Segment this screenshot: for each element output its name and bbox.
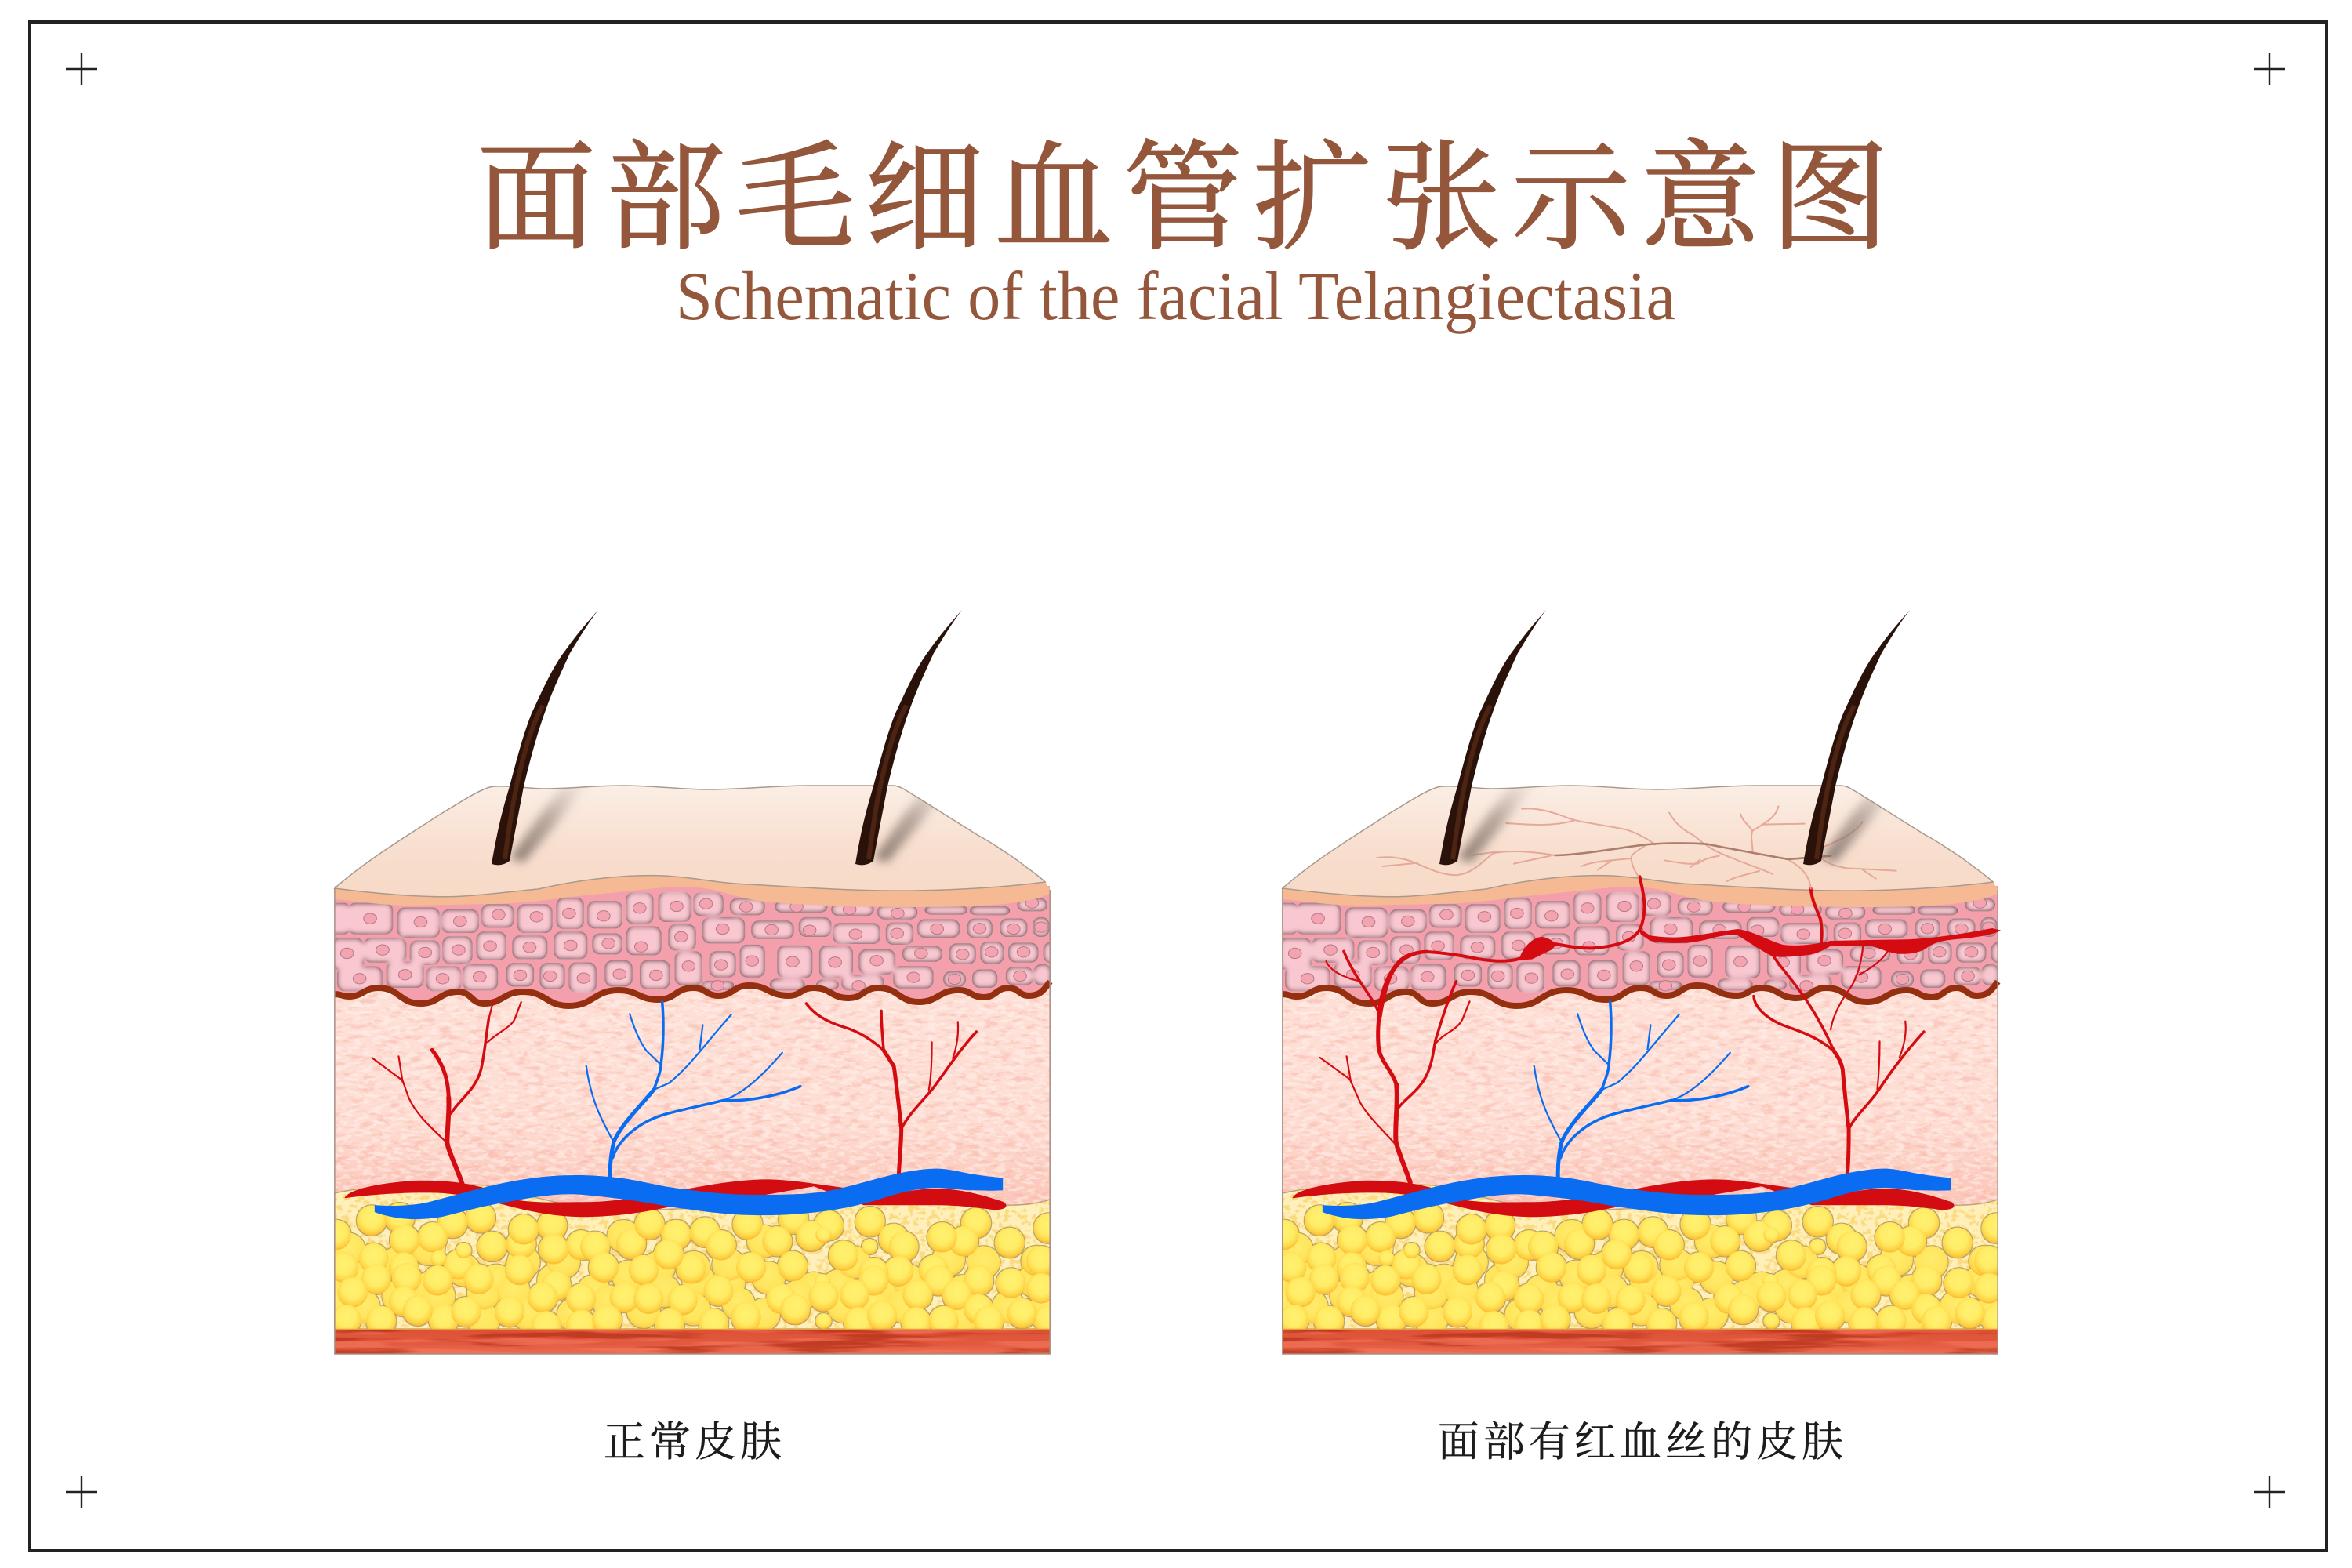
- epidermis cell layer: [328, 878, 1059, 1011]
- hair 1: [492, 610, 598, 865]
- telangiectasia in epidermis: [1381, 877, 2001, 1017]
- subtitle: Schematic of the facial Telangiectasia: [676, 259, 1675, 335]
- blue venule tree: [586, 1002, 800, 1178]
- muscle layer: [335, 1329, 1050, 1354]
- skin surface: [335, 786, 1045, 897]
- panel: skin with facial red blood streaks: [1260, 610, 2012, 1354]
- main vessels: blue tree, artery and vein: [345, 1002, 1007, 1219]
- dilated vessel right: [1639, 927, 2001, 957]
- skin cross-section layers: [312, 786, 1064, 1354]
- title: 面部毛细血管扩张示意图: [477, 133, 1889, 265]
- panel: normal skin: [312, 610, 1064, 1354]
- blue vein: [375, 1169, 1003, 1219]
- dermis layer: [335, 984, 1050, 1215]
- surface telangiectasia: [1377, 806, 1896, 888]
- stratum corneum band: [335, 876, 1050, 907]
- rising vessel: [1811, 888, 1822, 942]
- red capillary trees, dilated: [1320, 946, 1924, 1182]
- vessel bulge left: [1519, 937, 1556, 959]
- skin cross-section (repeat): [1260, 786, 2012, 1354]
- main vessels (repeat): [1293, 1002, 1955, 1219]
- red capillary trees, normal: [372, 1000, 976, 1184]
- hairs (repeat): [1439, 610, 1910, 865]
- basement membrane wavy line: [335, 982, 1050, 1006]
- subcutaneous fat layer: [312, 1180, 1064, 1341]
- hairs with shadows: [492, 610, 962, 865]
- caption: skin with red streaks: 面部有红血丝的皮肤: [1438, 1420, 1847, 1465]
- red artery: [345, 1179, 1007, 1217]
- hair shadows: [510, 782, 952, 862]
- dilated vessel left: [1381, 877, 1644, 1017]
- hair 2: [855, 610, 962, 865]
- caption: normal skin: 正常皮肤: [604, 1420, 786, 1465]
